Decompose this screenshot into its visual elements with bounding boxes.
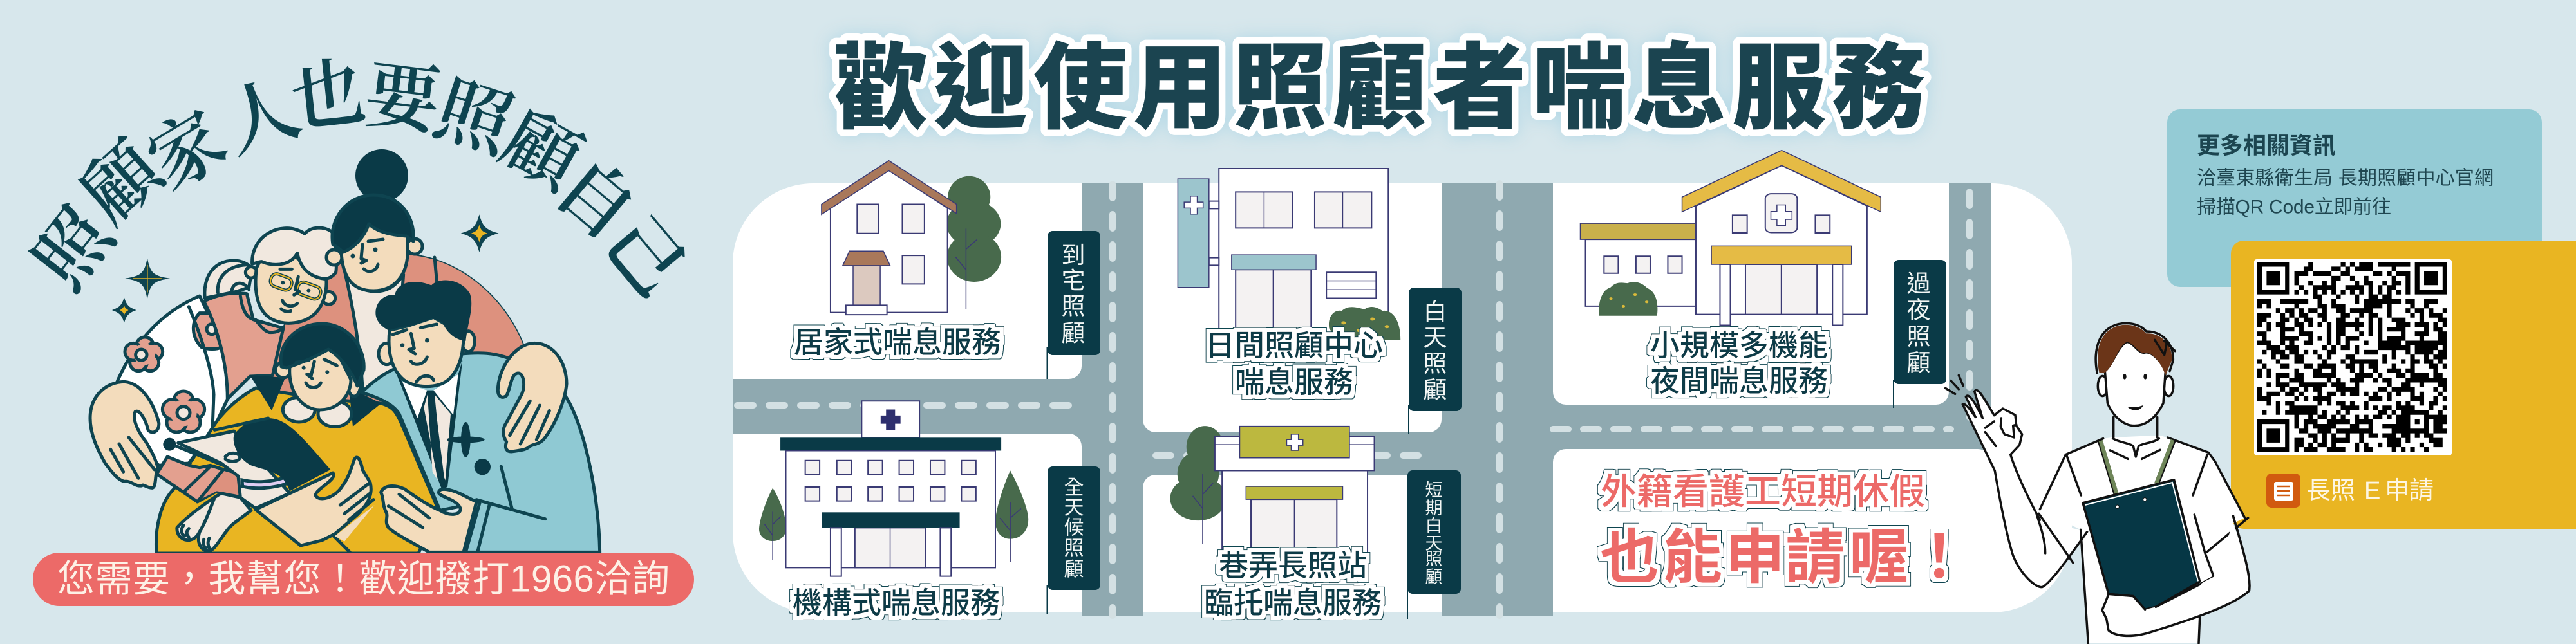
dog and paws xyxy=(156,418,330,551)
signpost: short-term daytime care xyxy=(1407,470,1461,619)
heading: arc slogan: 照 xyxy=(425,68,525,170)
signpost: home care xyxy=(1047,231,1100,379)
label: small multifunction night respite: 小規模多機能 xyxy=(1650,329,1828,362)
heading: arc slogan: 人 xyxy=(214,67,310,169)
QR code xyxy=(2257,264,2447,450)
signpost: all-day care xyxy=(1047,466,1100,614)
building: day care centre xyxy=(1178,169,1400,340)
app name: 長照E申請 xyxy=(2306,477,2434,504)
illustration: family xyxy=(90,150,600,553)
dog's mouth xyxy=(176,446,240,465)
panel: QR card xyxy=(2231,241,2576,529)
signpost: short-term daytime care: 短期白天照顧 xyxy=(1425,481,1442,587)
girl's yellow sweater xyxy=(156,388,438,553)
mother's back xyxy=(270,254,525,429)
heading: arc slogan: 照 xyxy=(19,192,131,304)
grandma's hair curl xyxy=(205,261,252,298)
grandma's cardigan xyxy=(204,293,283,399)
label: home respite: 居家式喘息服務 xyxy=(794,326,1001,359)
nurse's ears xyxy=(2098,376,2174,396)
nurse's outlines xyxy=(1946,375,2250,643)
callout: foreign caregiver leave: 外籍看護工短期休假 xyxy=(1601,471,1925,512)
grandma's hand xyxy=(90,382,159,488)
building: house xyxy=(822,161,1001,315)
nurse's shirt xyxy=(2040,436,2250,643)
panel: more information: 洽臺東縣衛生局 長期照顧中心官網 xyxy=(2197,167,2494,189)
building: neighbourhood care station xyxy=(1170,426,1375,559)
illustration: nurse xyxy=(1946,323,2250,643)
man's face xyxy=(389,317,464,387)
holding hand xyxy=(2102,523,2250,636)
clipboard xyxy=(2083,480,2200,609)
heading: arc slogan: 要 xyxy=(361,54,445,145)
heading: arc slogan: 自 xyxy=(540,145,650,255)
nurse's face xyxy=(2105,342,2165,426)
flower: partial xyxy=(193,313,221,349)
mother's blouse xyxy=(344,257,437,391)
heading: arc slogan: 家 xyxy=(135,97,241,207)
label: institutional respite: 機構式喘息服務 xyxy=(793,586,1000,620)
building: long-term care institution xyxy=(759,401,1028,576)
grandma's floral sleeve xyxy=(105,296,230,465)
building: small multifunction centre xyxy=(1580,151,1881,326)
nurse's raised arm xyxy=(1962,391,2087,587)
dog's head xyxy=(178,431,290,508)
jacket details xyxy=(447,422,545,552)
sweater collar points xyxy=(250,375,381,427)
label: neighbourhood station respite xyxy=(1204,549,1382,620)
dog's nose xyxy=(163,438,176,451)
man's jacket xyxy=(362,281,600,552)
dog's collar xyxy=(242,477,287,488)
flower: lower xyxy=(162,391,205,432)
man's hand xyxy=(381,486,476,552)
icon: document app xyxy=(2266,474,2300,508)
panel: street map xyxy=(733,183,2072,616)
lanyard xyxy=(2100,440,2174,494)
dog's paws xyxy=(177,493,251,551)
label: day care respite: 日間照顧中心 xyxy=(1205,329,1383,362)
signpost: overnight care: 過夜照顧 xyxy=(1907,270,1930,376)
banner: hotline: 您需要，我幫您！歡迎撥打1966洽詢 xyxy=(57,558,670,600)
flower: upper xyxy=(125,337,163,371)
label: day care respite: 喘息服務 xyxy=(1235,365,1353,399)
callout: foreign caregiver leave xyxy=(1600,471,1969,591)
hand outline xyxy=(2102,516,2250,636)
panel: more information: 掃描QR Code立即前往 xyxy=(2197,197,2391,217)
panel: more information: 更多相關資訊 xyxy=(2197,133,2336,158)
sparkles xyxy=(112,214,498,323)
dog's sleeve-like gift box xyxy=(156,457,241,502)
heading: arc slogan: 顧 xyxy=(67,126,180,239)
label: neighbourhood station respite: 臨托喘息服務 xyxy=(1204,586,1382,620)
label: neighbourhood station respite: 巷弄長照站 xyxy=(1219,549,1367,582)
heading: arc slogan: 顧 xyxy=(488,98,596,207)
label: day care respite xyxy=(1205,329,1383,399)
man's shirt and tie xyxy=(395,360,462,490)
girl's head xyxy=(276,324,364,410)
girl's collar xyxy=(283,397,352,427)
callout: foreign caregiver leave: 也能申請喔！ xyxy=(1600,525,1969,591)
label: small multifunction night respite: 夜間喘息服務 xyxy=(1650,364,1828,398)
mother's hair bun xyxy=(356,150,408,201)
dog's ear xyxy=(234,418,330,491)
collar xyxy=(2067,439,2248,584)
panel: more information xyxy=(2167,109,2542,287)
label: small multifunction night respite xyxy=(1650,329,1828,398)
signpost: all-day care: 全天候照顧 xyxy=(1064,476,1084,580)
heading: arc slogan: 己 xyxy=(589,201,700,312)
nurse's hair xyxy=(2096,323,2175,375)
girl's forearm and hand xyxy=(256,457,375,552)
mother's hand on shoulder xyxy=(498,343,567,452)
neck xyxy=(2114,417,2158,437)
man's hair xyxy=(375,281,471,341)
heading: arc slogan: 也 xyxy=(287,51,370,142)
mother's head xyxy=(326,195,422,291)
signpost: daytime care: 白天照顧 xyxy=(1423,299,1447,403)
signpost: overnight care xyxy=(1893,260,1946,408)
title: 歡迎使用照顧者喘息服務 xyxy=(834,36,1926,140)
signpost: home care: 到宅照顧 xyxy=(1061,242,1086,346)
signpost: daytime care xyxy=(1408,288,1462,434)
heading: arc slogan xyxy=(19,51,700,312)
grandma's head xyxy=(245,228,337,323)
man's ears xyxy=(379,331,475,365)
